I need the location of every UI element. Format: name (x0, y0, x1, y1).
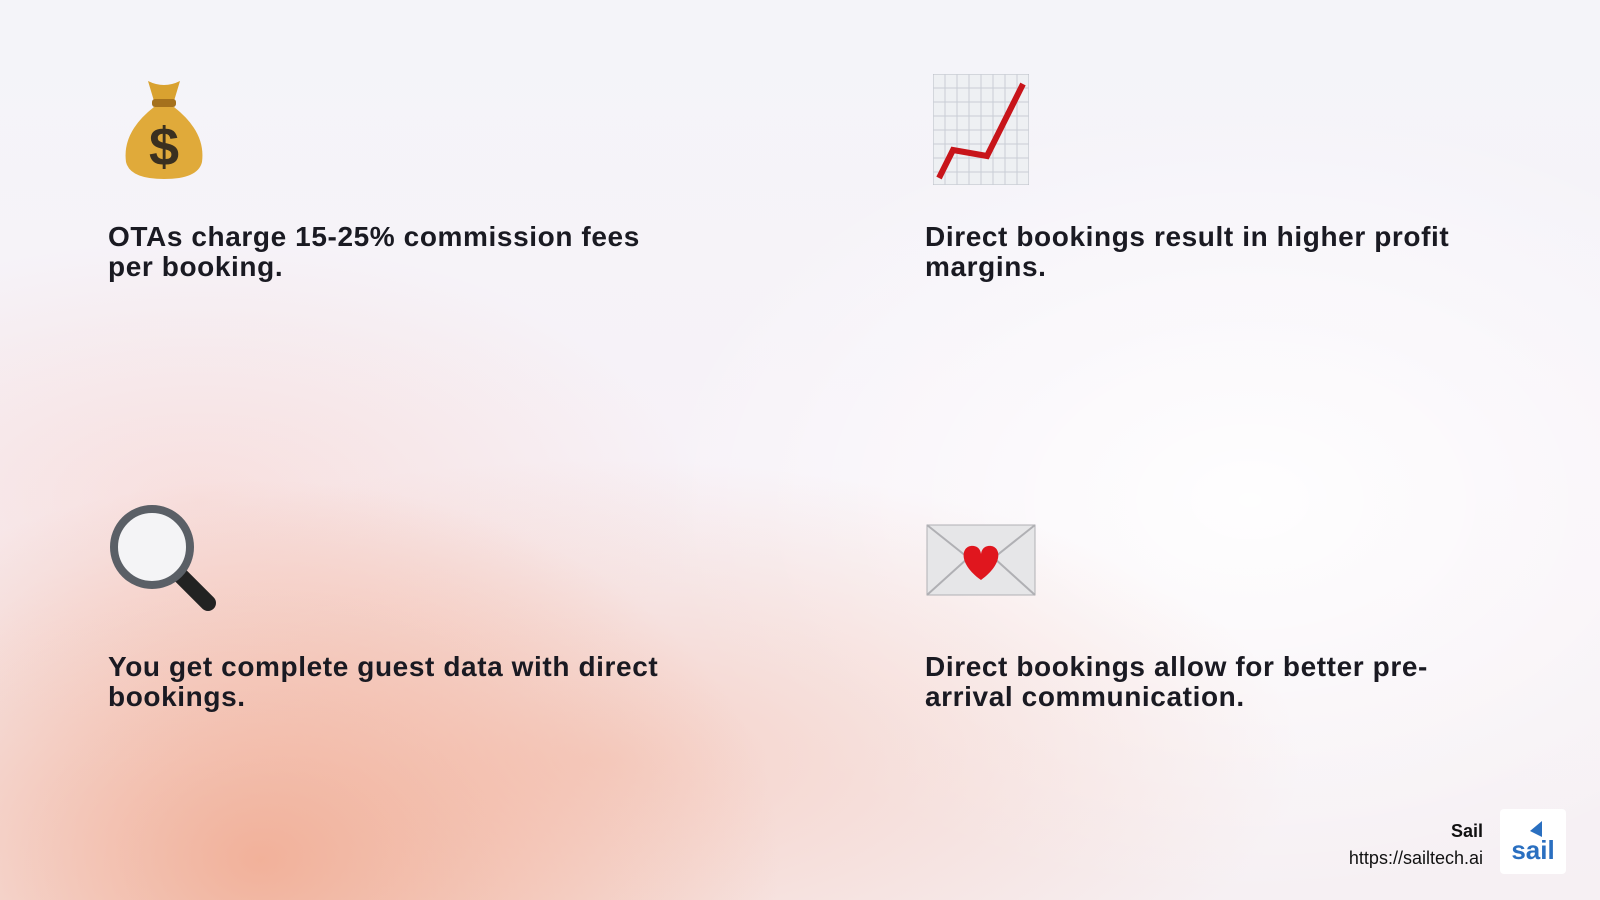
text: profit: margins. (925, 251, 1047, 282)
text: communication (925, 651, 1428, 712)
text: commission (108, 221, 640, 282)
brand text: Sail (1451, 821, 1483, 841)
logo: sail (1511, 835, 1555, 865)
icon: magnifier (110, 505, 216, 611)
text: guest data: bookings. (108, 681, 246, 712)
text: profit (925, 221, 1449, 282)
icon: money bag (126, 81, 202, 179)
text: commission: OTAs charge 15-25% commission fees (108, 221, 640, 252)
brand text (1349, 821, 1483, 868)
icon: money bag: $ (149, 117, 179, 177)
text: guest data: You get complete guest data with direct (108, 651, 658, 682)
text: guest data (108, 651, 658, 712)
text: communication: Direct bookings allow for better pre- (925, 651, 1428, 682)
icon: envelope heart (926, 524, 1036, 596)
text: communication: arrival communication. (925, 681, 1245, 712)
logo (1500, 809, 1566, 874)
icon: chart (933, 74, 1029, 185)
text: profit: Direct bookings result in higher profit (925, 221, 1449, 252)
brand text: https://sailtech.ai (1349, 848, 1483, 868)
text: commission: per booking. (108, 251, 283, 282)
